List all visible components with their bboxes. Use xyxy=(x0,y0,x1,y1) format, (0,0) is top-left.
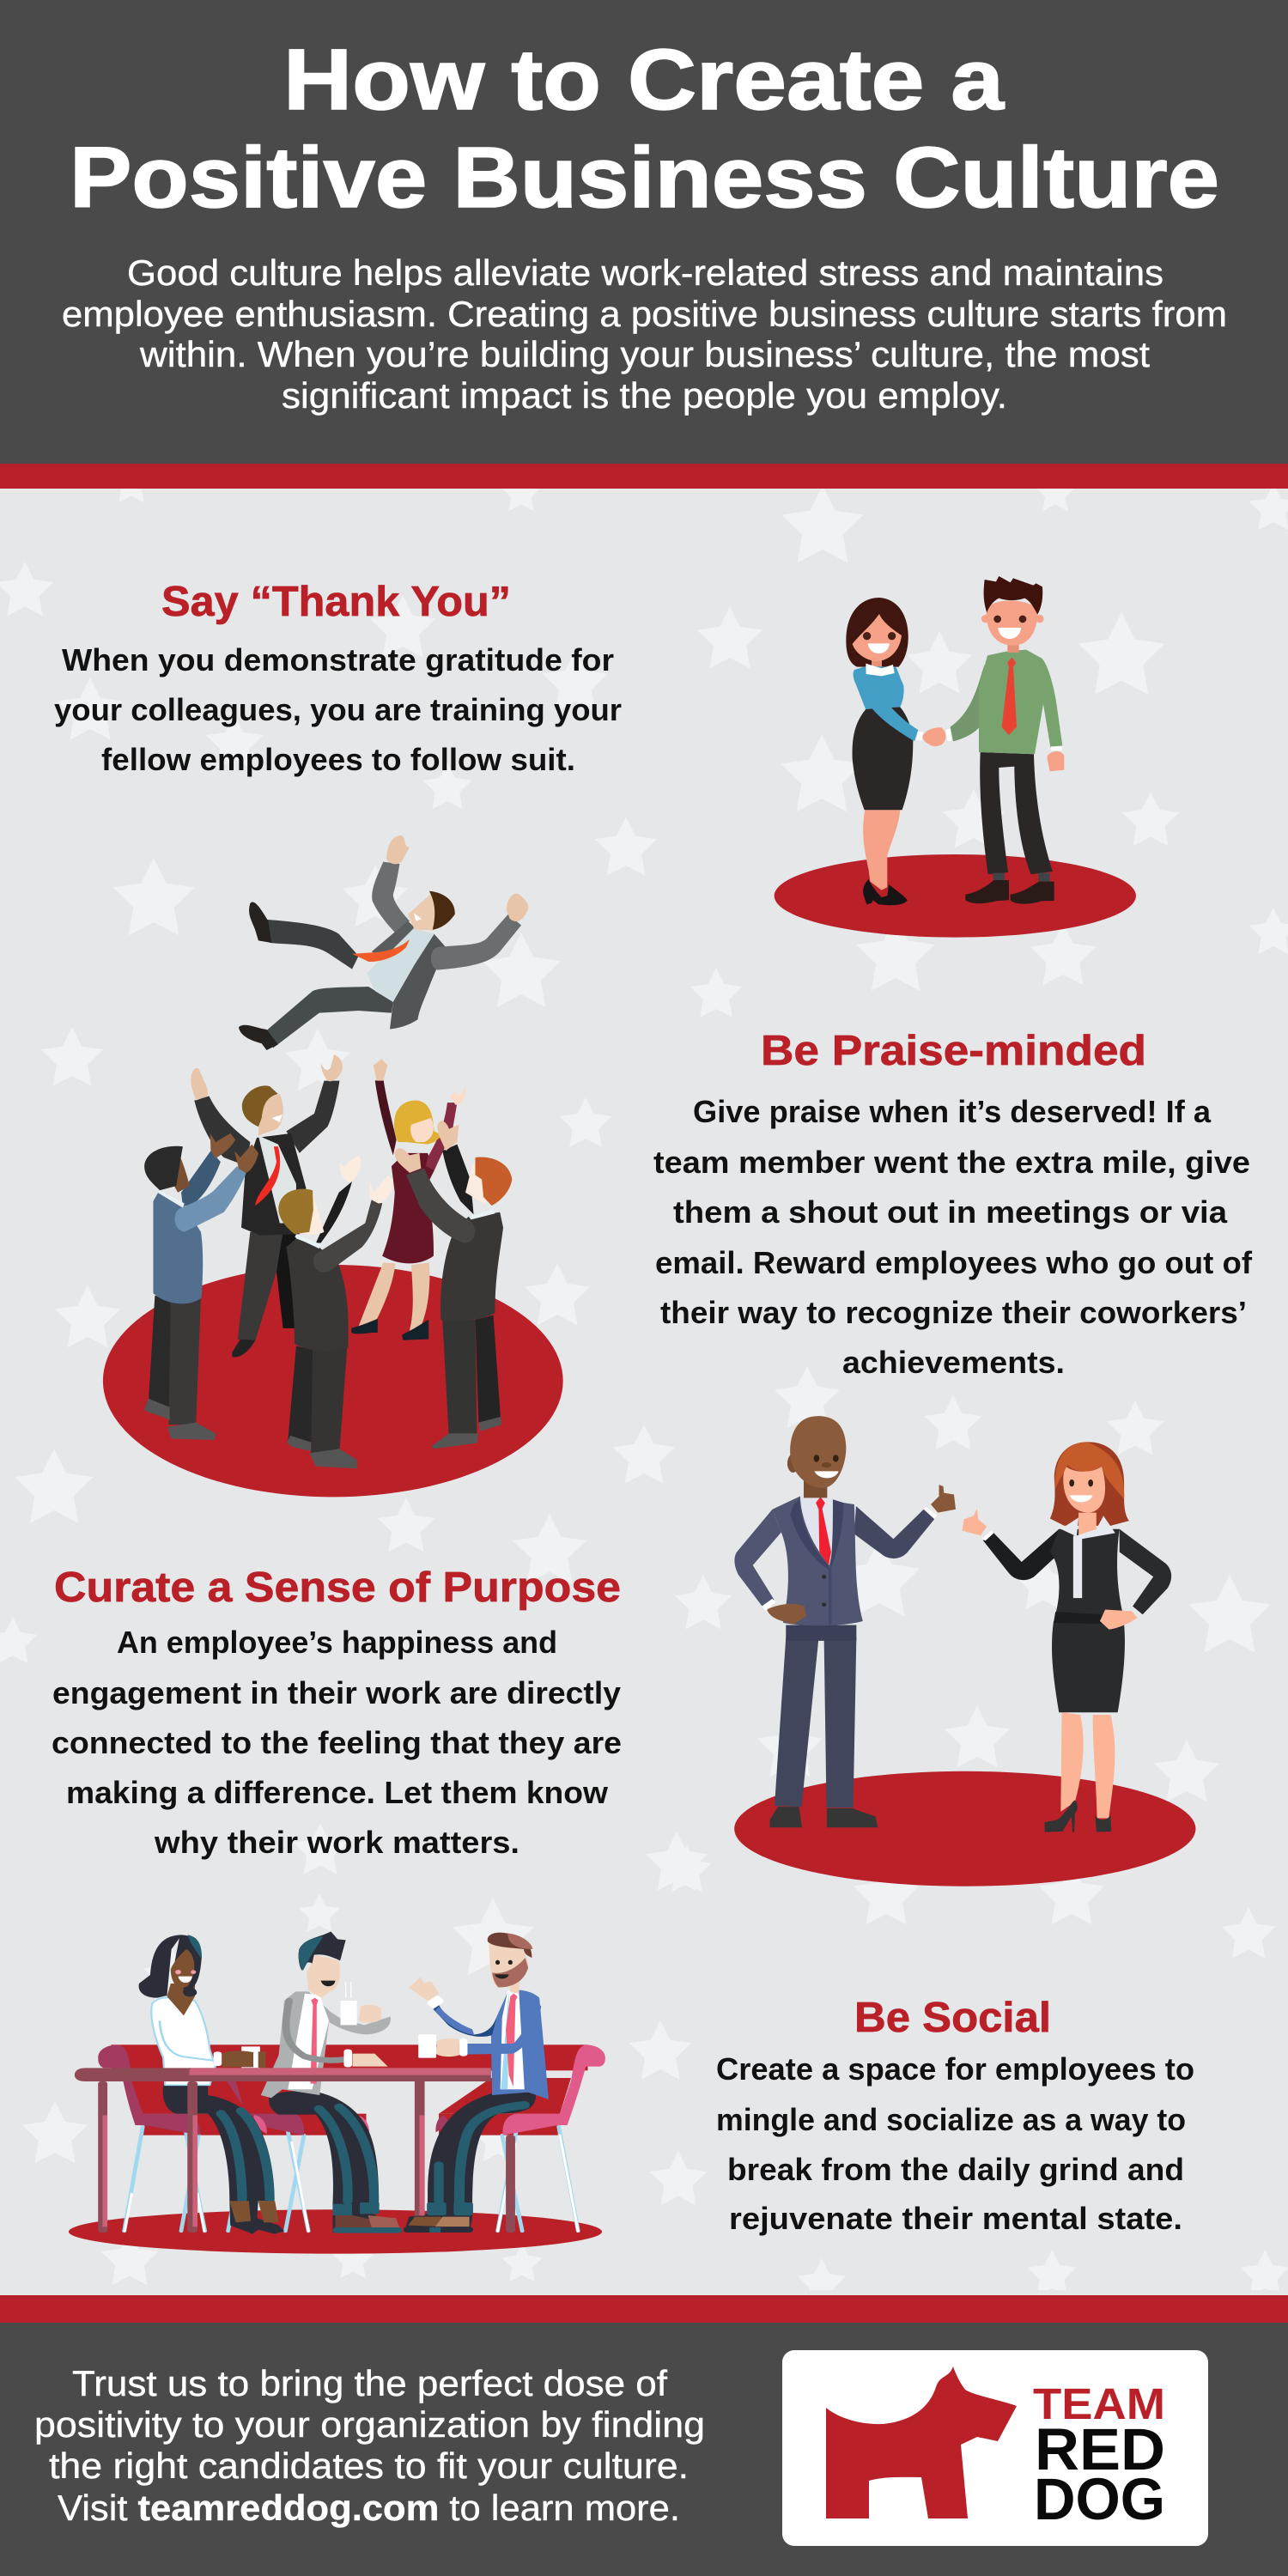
logo: Team Red Dog xyxy=(782,2350,1208,2546)
text block: Be Praise-minded: team member went the extra mile, give xyxy=(653,1145,1250,1180)
footer call to action: positivity to your organization by finding xyxy=(34,2404,705,2445)
text block: Be Social: break from the daily grind and xyxy=(727,2152,1184,2187)
illustration: team tossing colleague xyxy=(103,835,563,1497)
title: How to Create a xyxy=(283,32,1005,128)
thrown man xyxy=(239,835,528,1050)
woman xyxy=(139,1935,284,2234)
panel: footer xyxy=(0,2295,1288,2576)
text block: Be Praise-minded: their way to recognize their coworkers’ xyxy=(660,1295,1247,1330)
text block: Curate a Sense of Purpose: connected to the feeling that they are xyxy=(52,1725,622,1760)
intro text xyxy=(62,252,1227,416)
front centre man xyxy=(278,1155,393,1468)
woman in red dress xyxy=(351,1059,465,1340)
man in grey jacket xyxy=(261,1931,402,2233)
man in blue sweater xyxy=(144,1133,258,1440)
text block: Curate a Sense of Purpose: An employee’s happiness and xyxy=(117,1625,557,1660)
text block: Be Social xyxy=(716,1995,1194,2236)
bald man in suit xyxy=(734,1416,956,1827)
illustration: handshake xyxy=(775,576,1136,938)
text block: Say Thank You: Say “Thank You” xyxy=(161,579,511,625)
back man with red tie xyxy=(191,1054,343,1357)
footer call to action: the right candidates to fit your culture. xyxy=(49,2445,689,2486)
logo wordmark: DOG xyxy=(1034,2466,1165,2532)
footer call to action: Visit teamreddog.com to learn more. xyxy=(58,2488,680,2528)
text block: Curate a Sense of Purpose: why their work matters. xyxy=(154,1825,519,1860)
footer call to action: Trust us to bring the perfect dose of xyxy=(72,2363,667,2403)
icon: red dog xyxy=(826,2366,1017,2518)
text block: Say Thank You: When you demonstrate gratitude for xyxy=(62,642,614,677)
bearded man xyxy=(404,1933,549,2233)
illustration: colleagues at a table xyxy=(69,1931,605,2254)
illustration: thumbs up colleagues xyxy=(734,1416,1195,1886)
text block: Be Praise-minded xyxy=(653,1028,1253,1380)
text block: Be Praise-minded: email. Reward employees who go out of xyxy=(655,1245,1253,1280)
text block: Say Thank You: your colleagues, you are training your xyxy=(54,692,622,727)
title: Positive Business Culture xyxy=(70,130,1219,226)
text block: Curate a Sense of Purpose: engagement in their work are directly xyxy=(52,1675,621,1710)
text block: Curate a Sense of Purpose: making a difference. Let them know xyxy=(66,1775,609,1810)
handshake hands xyxy=(922,727,945,746)
logo wordmark: TEAM xyxy=(1033,2379,1165,2428)
logo wordmark xyxy=(1033,2379,1165,2532)
intro text: employee enthusiasm. Creating a positive business culture starts from xyxy=(62,294,1227,334)
man xyxy=(946,576,1064,904)
text block: Be Praise-minded: Be Praise-minded xyxy=(761,1028,1146,1074)
logo wordmark: RED xyxy=(1035,2416,1165,2482)
footer call to action xyxy=(34,2363,705,2528)
chairs xyxy=(98,2044,605,2231)
text block: Say Thank You xyxy=(54,579,622,777)
red-haired woman xyxy=(962,1442,1171,1832)
text block: Be Social: mingle and socialize as a way to xyxy=(716,2102,1186,2137)
table xyxy=(75,2068,515,2233)
text block: Be Praise-minded: Give praise when it’s deserved! If a xyxy=(693,1094,1212,1129)
text block: Curate a Sense of Purpose: Curate a Sense of Purpose xyxy=(54,1564,621,1611)
text block: Be Praise-minded: achievements. xyxy=(842,1345,1065,1380)
text block: Curate a Sense of Purpose xyxy=(52,1564,622,1860)
text block: Say Thank You: fellow employees to follow suit. xyxy=(101,742,575,777)
woman xyxy=(846,598,923,905)
intro text: Good culture helps alleviate work-related stress and maintains xyxy=(127,252,1163,293)
text block: Be Social: Be Social xyxy=(854,1995,1051,2041)
intro text: within. When you’re building your business’ culture, the most xyxy=(139,334,1150,374)
text block: Be Social: rejuvenate their mental state. xyxy=(729,2201,1182,2236)
text block: Be Praise-minded: them a shout out in meetings or via xyxy=(673,1194,1228,1230)
text block: Be Social: Create a space for employees to xyxy=(716,2051,1194,2087)
intro text: significant impact is the people you employ. xyxy=(282,375,1007,416)
title xyxy=(70,32,1219,226)
panel: header xyxy=(0,0,1288,464)
right man with orange hair xyxy=(395,1121,512,1449)
